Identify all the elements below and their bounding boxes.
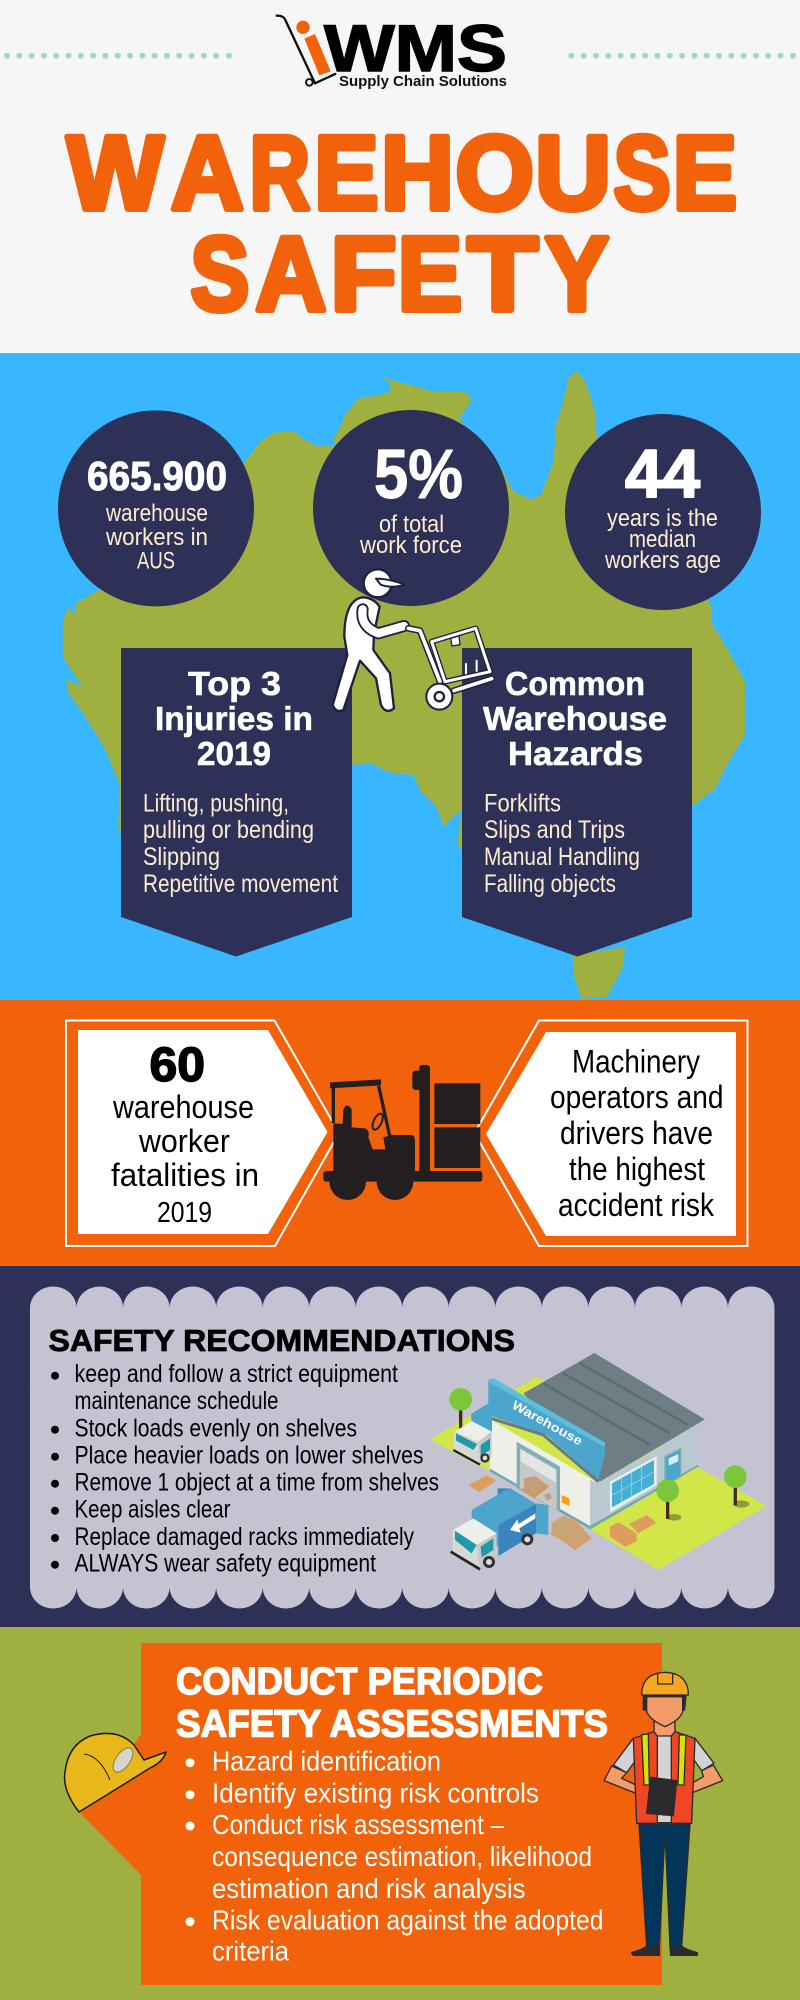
banner: common warehouse hazards: Common: [505, 665, 645, 702]
callout: machinery operators: drivers have: [560, 1115, 713, 1151]
heading: safety recommendations: SAFETY RECOMMENDATIONS: [48, 1323, 515, 1358]
list: recommendations: Keep aisles clear: [74, 1496, 230, 1524]
circle: workers: warehouse: [105, 500, 208, 527]
circle: workers: AUS: [137, 548, 175, 574]
banner: common warehouse hazards: Falling objects: [484, 870, 616, 898]
banner: top 3 injuries: Slipping: [143, 843, 220, 871]
banner: top 3 injuries: 2019: [197, 735, 271, 772]
banner: top 3 injuries: pulling or bending: [143, 816, 314, 844]
list: assessment steps: [186, 1746, 604, 1967]
illustration: warehouse building and trucks: Warehouse: [510, 1398, 585, 1448]
callout: machinery operators: accident risk: [558, 1187, 715, 1223]
circle: percent of work force: 5%: [374, 435, 463, 513]
title: E: [398, 216, 462, 333]
circle: workers: [58, 410, 254, 606]
title: F: [330, 216, 396, 333]
back truck: [453, 1403, 492, 1465]
circle: workers: 665.900: [87, 453, 227, 499]
dotted line right: [568, 53, 796, 59]
banner: top 3 injuries: [121, 648, 352, 956]
title: Y: [545, 216, 609, 333]
banner: top 3 injuries: Top 3: [188, 665, 281, 702]
title: O: [456, 115, 534, 232]
list: assessment steps: consequence estimation, likelihood: [212, 1841, 592, 1872]
callout: fatalities: [66, 1020, 339, 1246]
logo: [277, 11, 507, 90]
panel: safety recommendations: [30, 1286, 774, 1609]
banner: top 3 injuries: Injuries in: [155, 700, 313, 737]
icon: yellow hard hat: [65, 1733, 166, 1812]
banner: common warehouse hazards: Manual Handling: [484, 843, 640, 871]
callout: fatalities: 60: [150, 1039, 205, 1092]
list: recommendations: Remove 1 object at a time from shelves: [74, 1469, 439, 1497]
list: recommendations: Replace damaged racks immediately: [74, 1523, 414, 1551]
list: recommendations: ALWAYS wear safety equipment: [74, 1550, 376, 1578]
circle: median age: 44: [625, 436, 700, 512]
pallets: [469, 1475, 657, 1550]
callout: fatalities: worker: [138, 1123, 230, 1159]
callout: machinery operators: Machinery: [572, 1044, 700, 1080]
banner: common warehouse hazards: Slips and Trips: [484, 816, 625, 844]
list: recommendations: maintenance schedule: [74, 1387, 278, 1415]
list: assessment steps: criteria: [212, 1936, 289, 1967]
title: E: [314, 115, 379, 232]
heading: assessments: SAFETY ASSESSMENTS: [176, 1704, 608, 1746]
title: A: [256, 216, 326, 333]
callout: fatalities: warehouse: [112, 1089, 254, 1125]
icon: worker pushing hand truck: [333, 569, 492, 711]
title: S: [614, 115, 671, 232]
list: assessment steps: Conduct risk assessment –: [212, 1809, 504, 1840]
callout: machinery operators: the highest: [569, 1151, 705, 1187]
icon: forklift: [323, 1065, 482, 1200]
illustration: warehouse building and trucks: [430, 1353, 767, 1570]
list: assessment steps: Risk evaluation against the adopted: [212, 1905, 604, 1936]
banner: common warehouse hazards: Forklifts: [484, 790, 561, 818]
circle: median age: [565, 414, 761, 610]
heading: assessments: [176, 1661, 608, 1746]
banner: top 3 injuries: Repetitive movement: [143, 870, 338, 898]
title: T: [468, 216, 538, 333]
front truck: [451, 1488, 548, 1569]
title: W: [67, 115, 164, 232]
list: recommendations: Place heavier loads on lower shelves: [74, 1442, 424, 1470]
title: U: [535, 115, 611, 232]
title: [67, 115, 737, 333]
callout: fatalities: fatalities in: [111, 1157, 259, 1193]
list: recommendations: [51, 1360, 439, 1578]
title: R: [250, 115, 310, 232]
map of Australia: [63, 372, 745, 999]
illustration: safety inspector: [604, 1672, 723, 1955]
callout: machinery operators: [474, 1020, 748, 1246]
boxes: [552, 1515, 586, 1547]
callout: machinery operators: operators and: [550, 1079, 724, 1115]
banner: common warehouse hazards: Hazards: [508, 735, 643, 772]
circle: median age: workers age: [604, 547, 721, 574]
list: recommendations: Stock loads evenly on shelves: [74, 1415, 357, 1443]
circle: percent of work force: work force: [359, 532, 462, 559]
title: H: [381, 115, 454, 232]
list: assessment steps: Hazard identification: [212, 1746, 441, 1777]
heading: assessments: CONDUCT PERIODIC: [176, 1661, 543, 1703]
banner: top 3 injuries: Lifting, pushing,: [143, 790, 289, 818]
tree: [656, 1479, 679, 1519]
title: E: [673, 115, 737, 232]
dotted line left: [4, 53, 232, 59]
circle: median age: median: [629, 526, 696, 553]
banner: common warehouse hazards: Warehouse: [483, 700, 667, 737]
list: recommendations: keep and follow a strict equipment: [74, 1360, 398, 1388]
circle: median age: years is the: [607, 505, 718, 532]
title: S: [190, 216, 249, 333]
title: A: [171, 115, 244, 232]
circle: percent of work force: [313, 410, 509, 606]
tree: [449, 1388, 472, 1428]
banner: common warehouse hazards: [462, 648, 692, 956]
list: assessment steps: Identify existing risk controls: [212, 1778, 539, 1809]
logo: WMS: [324, 11, 507, 85]
circle: workers: workers in: [105, 524, 208, 551]
tree: [724, 1465, 747, 1505]
logo: Supply Chain Solutions: [339, 73, 507, 90]
list: assessment steps: estimation and risk analysis: [212, 1873, 526, 1904]
callout: fatalities: 2019: [157, 1197, 212, 1229]
circle: percent of work force: of total: [379, 511, 444, 538]
panel: periodic safety assessments: [80, 1643, 662, 1985]
